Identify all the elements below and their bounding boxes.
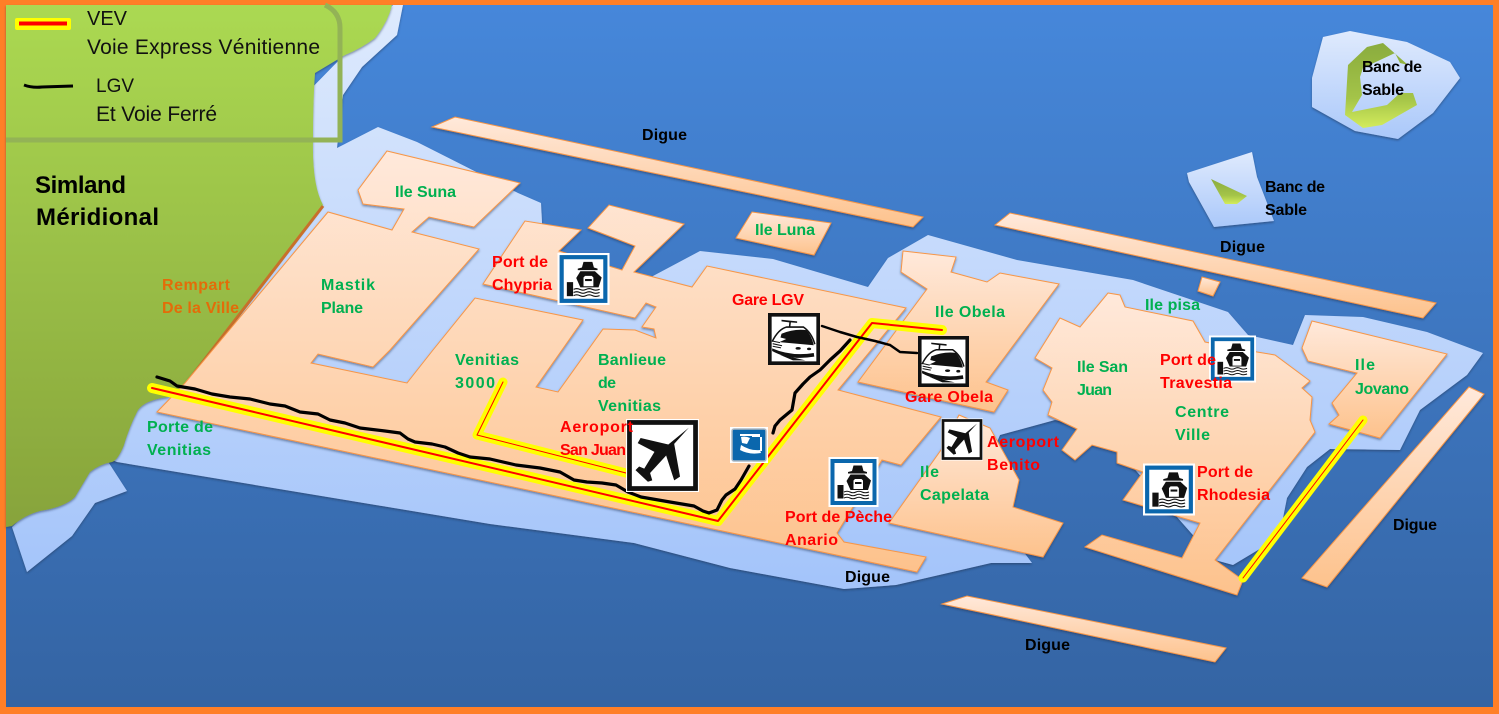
label: Ile Suna: Ile Suna xyxy=(395,184,456,201)
label: Digue south: Digue xyxy=(1025,637,1070,654)
label: Ile Obela: Ile Obela xyxy=(935,304,1005,321)
legend: LGV line xyxy=(24,85,73,87)
Ile pisa islet xyxy=(1198,277,1220,296)
dike east xyxy=(1302,387,1484,587)
legend: VEV text: VEV xyxy=(87,8,128,30)
red place labels xyxy=(492,254,1270,549)
icon: port de Chypria xyxy=(558,253,610,305)
icon: port de peche Anario xyxy=(828,457,878,507)
dike north-east xyxy=(995,213,1436,318)
label: Port de Rhodesia: Rhodesia xyxy=(1197,487,1270,504)
label: Porte de Venitias: Venitias xyxy=(147,442,211,459)
dike north xyxy=(432,117,923,227)
Ile Capelata xyxy=(889,415,1063,557)
label: Venitias 3000: Venitias xyxy=(455,352,519,369)
label: Mastik Plane: Plane xyxy=(321,300,363,317)
label: Aeroport San Juan: Aeroport xyxy=(560,419,634,436)
Ile Obela xyxy=(858,251,1059,412)
label: Banc de Sable north-east xyxy=(1362,59,1422,99)
label: Ile pisa: Ile pisa xyxy=(1145,297,1200,314)
dike south xyxy=(942,596,1226,662)
label: Mastik Plane xyxy=(321,277,375,317)
label: Port de Travestia: Port de xyxy=(1160,352,1216,369)
label: Banc de Sable east: Sable xyxy=(1265,202,1307,219)
icon: port blue sign xyxy=(730,427,768,463)
icon: gare Obela xyxy=(918,336,969,387)
label: Banlieue de Venitias xyxy=(598,352,666,415)
label: Porte de Venitias xyxy=(147,419,213,459)
legend: LGV text: LGV xyxy=(96,76,134,97)
legend: VEV text xyxy=(87,8,320,59)
label: Digue north-east: Digue xyxy=(1220,239,1265,256)
legend: VEV line xyxy=(15,18,71,30)
label: Aeroport San Juan xyxy=(560,419,634,459)
LGV railway line xyxy=(157,326,917,513)
icon: port de Rhodesia xyxy=(1143,464,1195,516)
label: Mastik Plane: Mastik xyxy=(321,277,375,294)
label: Banlieue de Venitias: de xyxy=(598,375,616,392)
title: Simland Méridional xyxy=(35,172,159,231)
label: Port de Chypria: Chypria xyxy=(492,277,552,294)
label: Ile Jovano: Ile xyxy=(1355,357,1375,374)
label: Port de Pèche Anario xyxy=(785,509,892,549)
label: Digue north: Digue xyxy=(642,127,687,144)
label: Port de Rhodesia: Port de xyxy=(1197,464,1253,481)
label: Port de Pèche Anario: Port de Pèche xyxy=(785,509,892,526)
icon: gare LGV xyxy=(768,313,820,365)
label: Digue centre: Digue xyxy=(845,569,890,586)
label: Gare Obela: Gare Obela xyxy=(905,389,993,406)
label: Port de Travestia: Travestia xyxy=(1160,375,1232,392)
label: Aeroport Benito: Aeroport xyxy=(987,434,1060,451)
label: Port de Rhodesia xyxy=(1197,464,1270,504)
label: Ile Jovano xyxy=(1355,357,1409,398)
label: Banc de Sable east xyxy=(1265,179,1325,219)
label: Digue east: Digue xyxy=(1393,517,1437,534)
label: Ile Capelata xyxy=(920,464,989,504)
map labels xyxy=(35,59,1437,654)
label: rampart: Rempart xyxy=(162,277,231,294)
icon: aeroport San Juan xyxy=(626,419,699,492)
label: Centre Ville xyxy=(1175,404,1229,444)
label: Venitias 3000 xyxy=(455,352,519,392)
label: Ile San Juan: Juan xyxy=(1077,382,1112,399)
islands and dikes xyxy=(157,117,1484,662)
Ile Luna xyxy=(736,212,831,255)
label: Banc de Sable north-east: Sable xyxy=(1362,82,1404,99)
rampart of the city xyxy=(185,206,323,385)
label: Ile San Juan xyxy=(1077,359,1128,399)
Ile Jovano xyxy=(1302,321,1447,438)
label: Port de Chypria xyxy=(492,254,552,294)
label: Banlieue de Venitias: Venitias xyxy=(598,398,661,415)
label: Aeroport Benito xyxy=(987,434,1060,474)
label: Ile Luna: Ile Luna xyxy=(755,222,815,239)
legend: VEV text: Voie Express Vénitienne xyxy=(87,36,320,59)
title: Simland Méridional: Simland xyxy=(35,172,126,199)
label: Banc de Sable north-east: Banc de xyxy=(1362,59,1422,76)
title: Simland Méridional: Méridional xyxy=(36,204,159,231)
label: Port de Chypria: Port de xyxy=(492,254,548,271)
legend: LGV text xyxy=(96,76,217,126)
label: Centre Ville: Centre xyxy=(1175,404,1229,421)
label: Porte de Venitias: Porte de xyxy=(147,419,213,436)
icon: port de Travestia xyxy=(1209,336,1256,382)
label: rampart: De la Ville xyxy=(162,300,239,317)
label: Ile Capelata: Capelata xyxy=(920,487,989,504)
label: Banlieue de Venitias: Banlieue xyxy=(598,352,666,369)
label: Ile Capelata: Ile xyxy=(920,464,939,481)
sand bank east xyxy=(1187,152,1274,227)
label: Ile Jovano: Jovano xyxy=(1355,381,1409,398)
legend: LGV text: Et Voie Ferré xyxy=(96,103,217,126)
icon: aeroport Benito xyxy=(941,418,983,460)
Ile San Juan and Centre Ville xyxy=(1035,293,1315,595)
label: Banc de Sable east: Banc de xyxy=(1265,179,1325,196)
sand bank north-east xyxy=(1312,31,1460,139)
legend box xyxy=(6,5,340,140)
label: Aeroport Benito: Benito xyxy=(987,457,1040,474)
label: Ile San Juan: Ile San xyxy=(1077,359,1128,376)
main city land xyxy=(157,151,941,572)
label: Aeroport San Juan: San Juan xyxy=(560,442,626,459)
label: Port de Travestia xyxy=(1160,352,1232,392)
label: Centre Ville: Ville xyxy=(1175,427,1210,444)
Simland mainland xyxy=(6,5,392,527)
label: Port de Pèche Anario: Anario xyxy=(785,532,838,549)
label: Venitias 3000: 3000 xyxy=(455,375,495,392)
label: rampart xyxy=(162,277,239,317)
label: Gare LGV: Gare LGV xyxy=(732,292,804,309)
VEV express road xyxy=(152,323,1363,578)
